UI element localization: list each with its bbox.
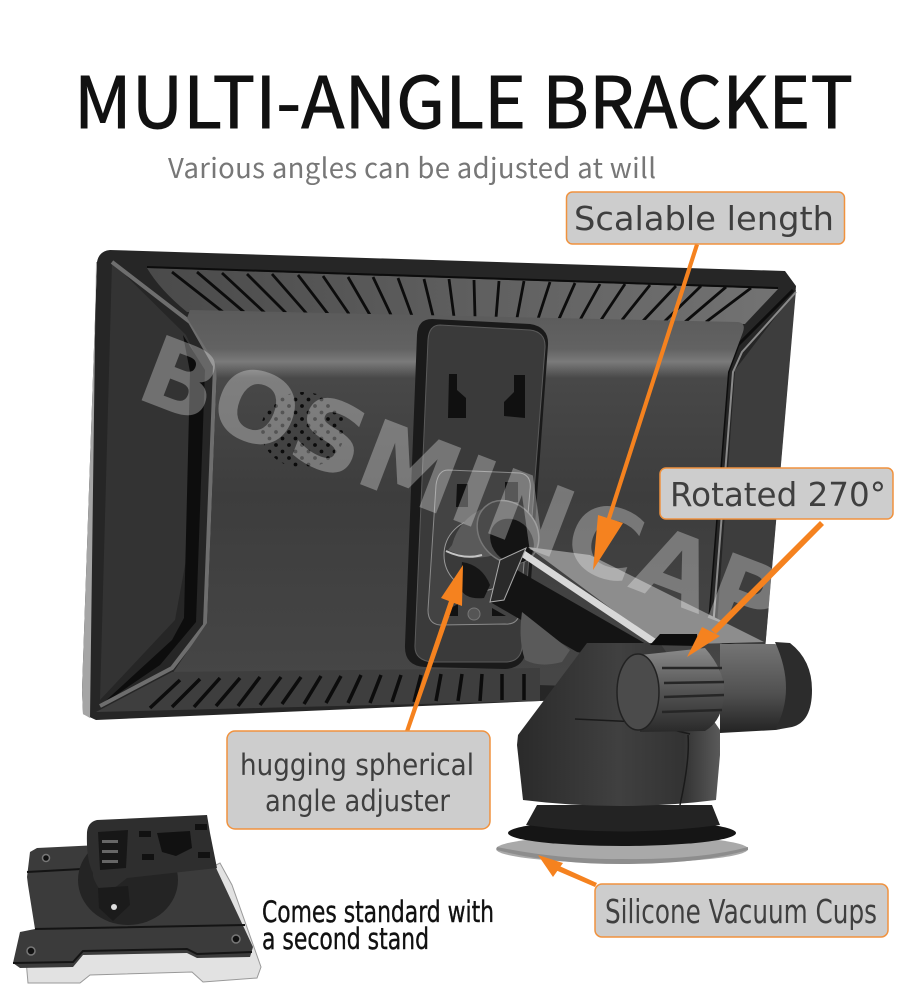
- arm collar: [490, 548, 526, 602]
- stand note: a second stand: [262, 922, 429, 956]
- knob end cap: [775, 642, 812, 730]
- cup neck: [526, 805, 720, 832]
- callout: hugging spherical angle adjuster: hugging spherical: [240, 748, 474, 782]
- clip bracket: [87, 815, 217, 890]
- plate slots: [448, 374, 525, 418]
- suction mount: [496, 634, 812, 864]
- watermark: BOSMINCAP: [125, 314, 800, 662]
- stand note: Comes standard with: [262, 895, 494, 929]
- arm lower section: [490, 562, 660, 664]
- cup disk: [508, 820, 736, 846]
- callout: hugging spherical angle adjuster: [227, 731, 490, 829]
- adhesive backing: [26, 863, 261, 983]
- speaker dots: [261, 392, 345, 468]
- mounting plate: [405, 319, 548, 669]
- arrow: rotated 270: [687, 521, 824, 657]
- callout: silicone vacuum cups: [595, 884, 888, 937]
- left wing: [100, 262, 200, 700]
- right wing: [716, 290, 796, 650]
- stand note: [262, 895, 494, 956]
- title: MULTI-ANGLE BRACKET: [74, 47, 853, 149]
- subtitle: Various angles can be adjusted at will: [168, 146, 656, 186]
- arm upper translucent section: [528, 547, 764, 645]
- left wing channel: [100, 335, 205, 706]
- top vent band: [147, 268, 778, 324]
- slot above knob: [650, 634, 698, 646]
- central panel: [172, 310, 744, 690]
- arrow: spherical adjuster: [405, 565, 463, 732]
- monitor rear view: [82, 250, 796, 720]
- ribbed knob: [640, 648, 724, 732]
- arrow: silicone cups: [538, 855, 597, 887]
- locking ring: [464, 488, 552, 576]
- ball stud: [98, 886, 130, 921]
- arrow: scalable length: [593, 244, 699, 570]
- mounting holes: [27, 854, 240, 955]
- base body: [517, 643, 720, 806]
- right ridge: [708, 290, 793, 622]
- swivel disc: [78, 835, 178, 925]
- knob cap: [617, 654, 659, 730]
- bottom vent band: [96, 668, 540, 712]
- callout: rotated 270: Rotated 270°: [670, 475, 886, 514]
- knob body: [720, 644, 797, 733]
- arm lower support: [521, 612, 570, 665]
- small clip plate: [428, 470, 530, 625]
- arm highlight: [522, 553, 660, 646]
- monitor outer shell: [82, 250, 796, 720]
- base plate: [13, 840, 253, 968]
- telescopic arm: [490, 547, 764, 664]
- silicone cup: [496, 835, 748, 863]
- callout: hugging spherical angle adjuster: angle adjuster: [265, 784, 450, 818]
- ball joint: [444, 488, 552, 598]
- second stand: [13, 815, 261, 983]
- callout: scalable length: Scalable length: [574, 199, 834, 238]
- left ridge highlights: [100, 262, 215, 706]
- callout: scalable length: [566, 192, 844, 244]
